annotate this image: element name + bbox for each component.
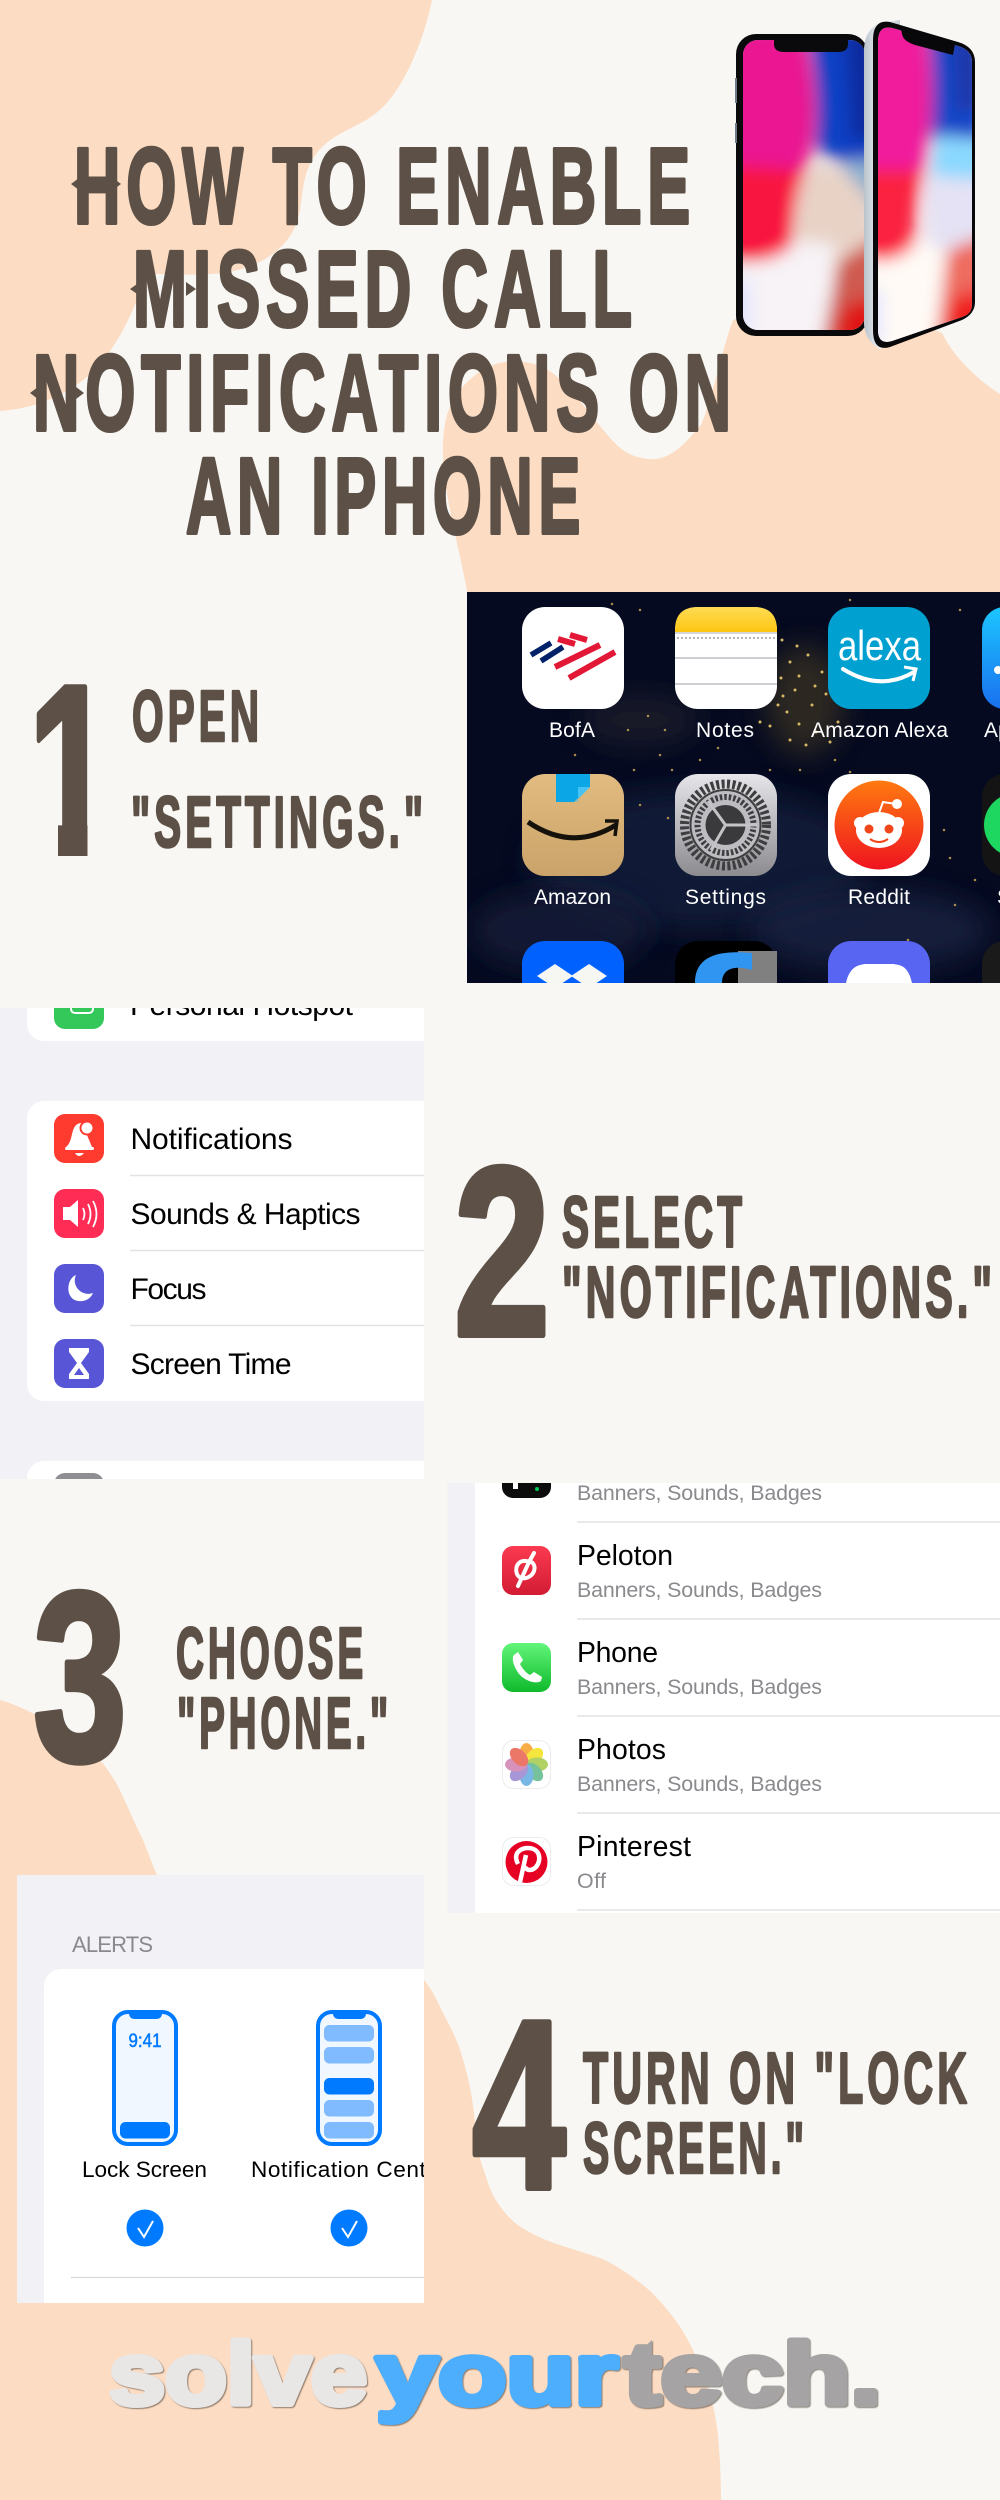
step 3 text: CHOOSE [176,1614,367,1694]
phone: right [864,20,975,349]
icon: partial dark app [982,774,1000,876]
icon: screen time hourglass [54,1339,104,1388]
panel: app notification list screenshot [475,1483,1000,1913]
icon: BofA [522,607,624,709]
option: lock screen: Lock Screen [82,2157,207,2182]
step 1 text: OPEN [132,677,263,757]
foot cover for number one [15,815,125,862]
card: notifications group: Screen Time [130,1348,292,1381]
phones illustration [735,20,975,349]
blob: top left [0,0,432,411]
icon: Alexa: alexa [838,622,922,669]
icon: Reddit [828,774,930,876]
step 4 number: 4 [472,1971,566,2240]
icon: focus moon [54,1264,104,1313]
row: Peloton: Banners, Sounds, Badges [577,1578,822,1602]
step 1 text: "SETTINGS." [131,783,427,863]
logo: solveyourtech [109,2326,881,2423]
step 2 number: 2 [454,1118,550,1387]
logo: solveyourtech: your [376,2326,618,2423]
icon: sounds speaker [54,1189,104,1238]
logo: solveyourtech: tech. [624,2326,881,2423]
step 3 text: "PHONE." [177,1684,392,1764]
card: hotspot row: Personal Hotspot [130,989,354,1022]
panel: settings list screenshot [27,1008,424,1479]
row: Pinterest: Pinterest [577,1831,691,1863]
icon: Alexa [828,607,930,709]
icon: Discord [828,941,930,983]
step 2 text: SELECT [562,1183,746,1263]
row: Pinterest: Off [577,1869,606,1893]
row: Pinterest [502,1835,691,1888]
panel: home screen screenshot [467,592,1000,983]
row: Photos: Photos [577,1734,666,1766]
row: Phone: Phone [577,1637,658,1669]
app labels: Settings [685,886,766,909]
step 3 text [176,1614,392,1764]
app labels: BofA [549,719,595,742]
icon: partial dark app row 3 [982,942,1000,983]
title: MISSED CALL [133,228,638,349]
title [30,125,737,556]
icon: Notes [675,607,777,709]
card: next group [27,1461,424,1479]
logo: solveyourtech: solve [109,2326,367,2423]
app labels [534,719,1000,909]
app labels: Reddit [848,886,910,909]
icon: Amazon [522,774,624,876]
row: Photos: Banners, Sounds, Badges [577,1772,822,1796]
alerts heading: ALERTS [72,1932,153,1957]
icon: Dropbox [522,941,624,983]
step 3 number: 3 [33,1543,127,1812]
row: Phone [502,1637,822,1699]
phone: left [735,34,865,336]
option: lock screen: 9:41 [128,2031,162,2052]
option: notification center [252,2010,424,2246]
row: Phone: Banners, Sounds, Badges [577,1675,822,1699]
icon: Settings [675,774,777,876]
step 2 text [562,1183,996,1333]
app labels: Notes [696,719,754,742]
app labels: Amazon [534,886,611,909]
card: notifications group: Focus [130,1273,206,1306]
icon: S app [675,941,777,983]
option: notification center: Notification Center [251,2157,447,2182]
wallpaper: earth at night [470,590,990,970]
blob: title right [443,290,1000,800]
row: Peloton [502,1540,822,1602]
step 4 text [583,2039,971,2189]
title: AN IPHONE [186,435,586,556]
row: Peloton: Peloton [577,1540,673,1572]
panel: alerts screenshot [17,1875,424,2303]
card: notifications group: Sounds & Haptics [130,1198,360,1231]
card: notifications group: Notifications [130,1123,292,1156]
step 1 text [131,677,427,863]
alerts card [44,1969,424,2303]
card: notifications group [27,1101,447,1401]
icon: partial blue app [982,607,1000,709]
blob: bottom [0,1700,721,2500]
card: hotspot row [27,1008,424,1041]
row: Photos [502,1734,822,1796]
step 1 number: 1 [28,635,114,904]
icon: notifications bell [54,1114,104,1163]
step 4 text: SCREEN." [583,2109,808,2189]
row: clipped app: Banners, Sounds, Badges [577,1481,822,1505]
app labels: Amazon Alexa [811,719,948,742]
option: lock screen [82,2011,207,2246]
